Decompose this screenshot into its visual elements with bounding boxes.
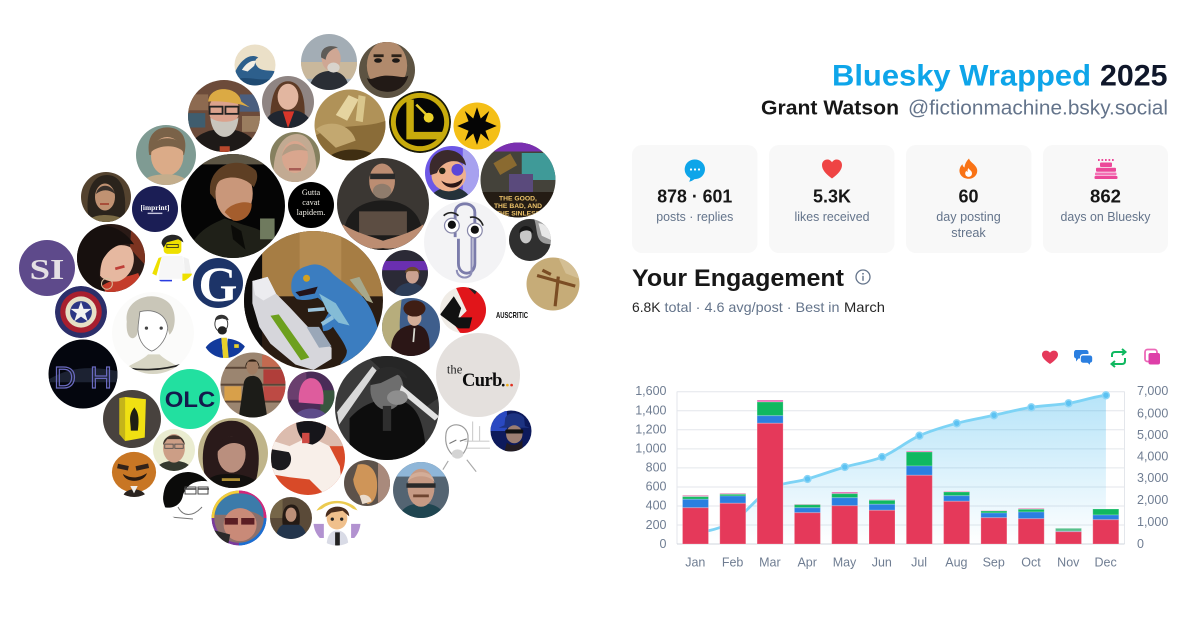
- avatar: sandy sculpture: [314, 90, 386, 160]
- cumulative line: [696, 395, 1106, 533]
- avatar: bald man arms crossed: [337, 158, 429, 250]
- right axis labels: 7,000: [1137, 384, 1168, 398]
- stat card: posts and replies: [632, 145, 758, 253]
- grid: [677, 392, 1124, 544]
- bar: Jan: [682, 495, 708, 544]
- avatar: boy portrait: [136, 125, 196, 185]
- avatar: black star on yellow: [454, 102, 500, 150]
- bar: Dec: [1093, 509, 1119, 544]
- avatar: orange muppet: [112, 452, 156, 497]
- bar: Feb: [720, 493, 746, 544]
- avatar: Clippy paperclip: [424, 201, 506, 283]
- right axis labels: 4,000: [1137, 450, 1168, 464]
- avatar: Legion yellow logo: [389, 91, 451, 153]
- avatar: great wave: [234, 44, 276, 86]
- avatar: The Curb logo: Curb: [462, 370, 502, 390]
- icon: info: [856, 270, 870, 284]
- stat card: days on Bluesky: 862: [1090, 186, 1121, 206]
- avatar: imprint logo: [imprint]: [140, 203, 170, 212]
- avatar: Gutta cavat lapidem: Gutta: [302, 188, 321, 197]
- right axis labels: 3,000: [1137, 471, 1168, 485]
- month labels: Jul: [911, 556, 927, 570]
- right axis labels: 1,000: [1137, 515, 1168, 529]
- bar: Jul: [906, 451, 932, 544]
- month labels: May: [833, 556, 857, 570]
- month labels: Jan: [685, 556, 705, 570]
- engagement summary line: [632, 299, 885, 315]
- avatar: Shadowrun book cover: THE BAD, AND: [494, 203, 542, 210]
- engagement summary line: March: [844, 299, 885, 315]
- bar: Sep: [981, 510, 1007, 544]
- left axis labels: 600: [646, 480, 667, 494]
- avatar: imprint logo: [132, 186, 178, 232]
- icon: birthday cake: [1094, 159, 1118, 179]
- title: Bluesky Wrapped: [832, 60, 1091, 92]
- avatar: Victorian woman: [382, 298, 440, 356]
- avatar: DH logo: DH: [54, 362, 112, 395]
- month labels: Apr: [797, 556, 817, 570]
- avatar bubble cluster: [19, 34, 580, 546]
- avatar: man on beach: [301, 34, 357, 90]
- avatar: man with yellow hat and books: [188, 80, 260, 152]
- month labels: Nov: [1057, 556, 1080, 570]
- stat card: days on Bluesky: days on Bluesky: [1060, 209, 1151, 224]
- avatar: SI logo: [19, 240, 75, 296]
- bar: Jun: [869, 499, 895, 544]
- month labels: Oct: [1021, 556, 1041, 570]
- left axis labels: 800: [646, 460, 667, 474]
- cumulative area: [696, 395, 1106, 544]
- avatar: sticks on sand: [526, 258, 580, 310]
- avatar: Gutta cavat lapidem: lapidem.: [297, 208, 325, 217]
- left axis labels: 200: [646, 518, 667, 532]
- avatar: woman in purple venue: [382, 250, 428, 296]
- stat card: day posting streak: streak: [951, 225, 986, 240]
- bar: Apr: [794, 504, 820, 544]
- right axis labels: 2,000: [1137, 493, 1168, 507]
- right axis labels: 0: [1137, 537, 1144, 551]
- left axis labels: 1,200: [635, 422, 667, 436]
- avatar: woman with painting: [81, 172, 131, 222]
- avatar: Gutta cavat lapidem: [288, 182, 334, 228]
- month labels: Jun: [872, 556, 892, 570]
- right axis labels: 5,000: [1137, 428, 1168, 442]
- title: 2025: [1100, 60, 1168, 92]
- avatar: woman with dark hair in room: [270, 497, 312, 539]
- avatar: large portrait of man with goatee: [181, 154, 285, 258]
- month labels: Feb: [722, 556, 743, 570]
- avatar: sketch of bald man: [442, 422, 490, 472]
- avatar: yellow black cat box: [103, 390, 161, 448]
- month labels: Sep: [983, 556, 1005, 570]
- engagement chart: [635, 384, 1168, 570]
- heading: Your Engagement: Your Engagement: [632, 265, 844, 292]
- avatar: OLC logo: OLC: [165, 387, 215, 412]
- avatar: The Curb logo: [436, 333, 520, 417]
- icon: reply legend: [1074, 350, 1092, 365]
- user name and handle: [761, 98, 1168, 120]
- stat card: likes received: likes received: [794, 209, 870, 224]
- avatar: SI logo: SI: [30, 255, 64, 286]
- avatar: woman with blue hair and ring: [212, 490, 266, 546]
- avatar: Captain America shield: [55, 286, 107, 338]
- bar: May: [832, 492, 858, 544]
- engagement summary line: 6.8K: [632, 299, 661, 315]
- avatar: AUSCRITIC wordmark: AUSCRITIC: [496, 310, 528, 320]
- icon: chat bubble: [685, 159, 705, 182]
- avatar: yawning black and white cat: [271, 421, 345, 495]
- avatar: Shadowrun book cover: THE GOOD,: [499, 195, 537, 202]
- stacked bars: [682, 400, 1119, 544]
- avatar: cartoon person with halo: [314, 500, 360, 546]
- engagement summary line: total · 4.6 avg/post · Best in: [664, 299, 840, 315]
- cumulative points: [804, 392, 1109, 482]
- avatar: woman with long dark hair: [198, 418, 268, 488]
- icon: heart: [822, 160, 842, 178]
- stat card: likes received: 5.3K: [813, 186, 852, 206]
- icon: quote legend: [1145, 350, 1160, 364]
- avatar: flapper illustration: [77, 224, 145, 292]
- right axis labels: [1137, 384, 1168, 551]
- month labels: Mar: [759, 556, 781, 570]
- avatar: black and white woman: [509, 219, 551, 261]
- avatar: pencil sketch of woman: [126, 296, 180, 374]
- avatar: Shadowrun book cover: THE SINLESS: [496, 210, 541, 217]
- avatar: blue Godzilla at a machine (largest): [244, 231, 383, 370]
- avatar: man in blue top hat: [490, 410, 532, 452]
- chart legend icons: [1042, 349, 1160, 367]
- avatar: sleeping orange cat: [344, 460, 390, 506]
- avatar: OLC logo: [160, 369, 220, 429]
- stat card: day posting streak: [906, 145, 1032, 253]
- month labels: Aug: [945, 556, 968, 570]
- avatar: cartoon boy with eyepatch: [425, 146, 479, 200]
- bar: Mar: [757, 400, 783, 544]
- avatar: ink sketch of person with glasses: [163, 472, 209, 520]
- month labels: [685, 556, 1117, 570]
- left axis labels: 1,400: [635, 404, 667, 418]
- avatar: Guardian G logo: G: [199, 256, 237, 312]
- avatar: Gutta cavat lapidem: cavat: [302, 198, 320, 207]
- stat card: posts and replies: 878 · 601: [657, 186, 732, 206]
- right axis labels: 6,000: [1137, 406, 1168, 420]
- bar: Nov: [1056, 528, 1082, 544]
- stat card: days on Bluesky: [1043, 145, 1168, 253]
- stat card: day posting streak: 60: [958, 186, 978, 206]
- avatar: woman in front of bookshelves: [220, 352, 286, 418]
- left axis labels: [635, 384, 667, 551]
- avatar: man with glasses on city view: [393, 462, 449, 518]
- avatar: black and white man in suit: [335, 356, 439, 460]
- bar: Oct: [1018, 508, 1044, 544]
- left axis labels: 1,000: [635, 442, 667, 456]
- avatar: red and black art: [440, 287, 486, 333]
- stat card: likes received: [769, 145, 894, 253]
- icon: flame: [959, 158, 977, 179]
- user name and handle: Grant Watson: [761, 98, 899, 120]
- left axis labels: 1,600: [635, 384, 667, 398]
- avatar: The Curb logo: the: [447, 362, 463, 376]
- avatar: Shadowrun book cover: [480, 142, 556, 218]
- bar: Aug: [944, 491, 970, 544]
- avatar: DH logo: [48, 340, 118, 408]
- avatar: lego figure: [152, 234, 192, 282]
- stat card: posts and replies: posts · replies: [656, 209, 734, 224]
- user name and handle: @fictionmachine.bsky.social: [908, 98, 1168, 120]
- avatar: woman in red blouse: [262, 76, 314, 128]
- icon: repost legend: [1112, 349, 1126, 367]
- avatar: AUSCRITIC wordmark: [495, 310, 529, 320]
- stat card: day posting streak: day posting: [936, 209, 1001, 224]
- avatar: smiling man with glasses: [153, 429, 195, 471]
- left axis labels: 0: [660, 537, 667, 551]
- left axis labels: 400: [646, 498, 667, 512]
- avatar: bearded man in blue suit icon: [206, 314, 245, 358]
- avatar: fair-haired woman: [270, 132, 320, 182]
- avatar: bearded man close-up: [359, 42, 415, 98]
- avatar: pink hair: [288, 372, 334, 418]
- month labels: Dec: [1094, 556, 1117, 570]
- icon: like legend: [1042, 351, 1058, 364]
